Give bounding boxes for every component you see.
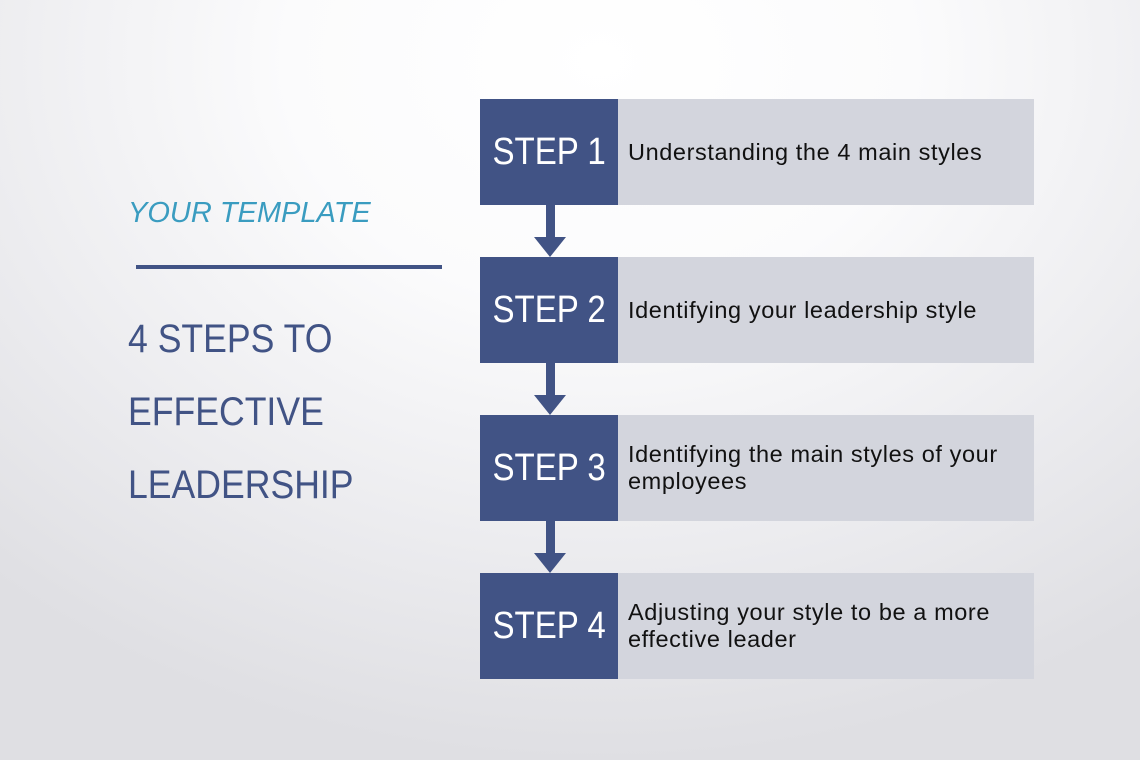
step 4 text: effective leader (628, 626, 797, 652)
step 3 text (618, 415, 1034, 521)
step 3: STEP 3 (492, 446, 606, 488)
arrow 2 (534, 363, 566, 415)
step 2 text: Identifying your leadership style (628, 296, 977, 322)
subtitle: YOUR TEMPLATE (128, 197, 371, 229)
arrow 1 (534, 205, 566, 257)
step 3 text: Identifying the main styles of your (628, 441, 998, 467)
step 4 text (618, 573, 1034, 679)
step 2 (480, 257, 618, 363)
title: EFFECTIVE (128, 390, 324, 434)
step 2: STEP 2 (492, 288, 606, 330)
arrow 3 (534, 521, 566, 573)
title: LEADERSHIP (128, 463, 354, 507)
title (128, 317, 354, 507)
step 1 text: Understanding the 4 main styles (628, 138, 982, 164)
step 2 text (618, 257, 1034, 363)
title: 4 STEPS TO (128, 317, 332, 361)
step 1 text (618, 99, 1034, 205)
step 3 text: employees (628, 468, 747, 494)
step 4 (480, 573, 618, 679)
step 4 text: Adjusting your style to be a more (628, 599, 990, 625)
step 3 (480, 415, 618, 521)
step 1: STEP 1 (492, 130, 606, 172)
step 1 (480, 99, 618, 205)
step 4: STEP 4 (492, 604, 606, 646)
